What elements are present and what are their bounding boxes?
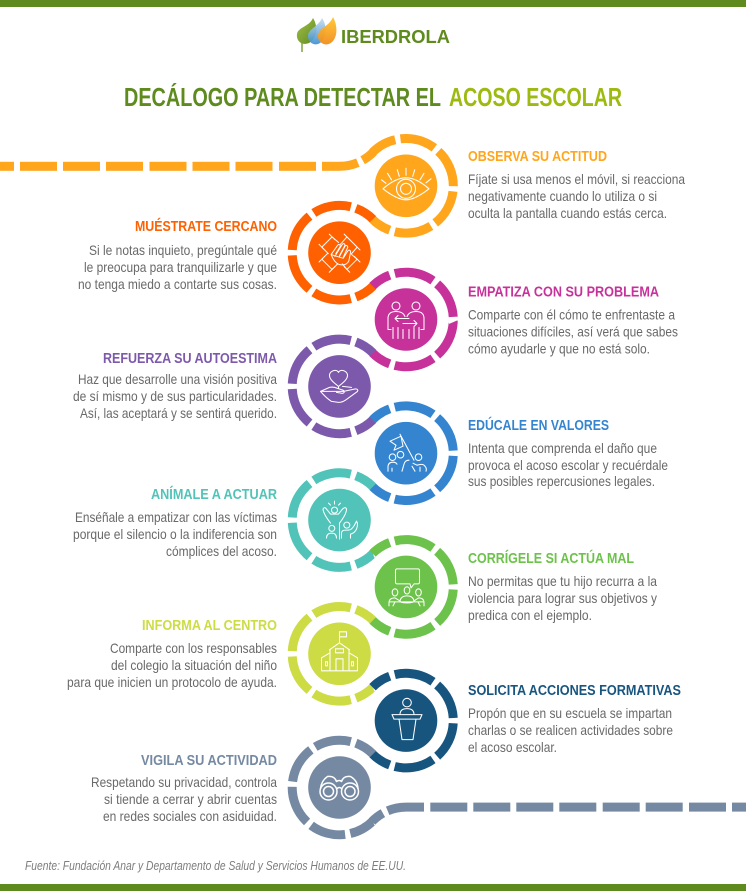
icon: meeting with speech bubble bbox=[389, 569, 424, 606]
text: anímale a actuar: cómplices del acoso. bbox=[166, 543, 277, 559]
text: informa al centro: INFORMA AL CENTRO bbox=[142, 618, 277, 634]
text: muéstrate cercano: le preocupa para tranquilizarle y que bbox=[84, 259, 277, 275]
text: observa su actitud bbox=[468, 149, 685, 221]
text: corrígele si actúa mal: predica con el ejemplo. bbox=[468, 607, 592, 623]
text: edúcale en valores: Intenta que comprenda el daño que bbox=[468, 440, 657, 456]
text: anímale a actuar: ANÍMALE A ACTUAR bbox=[151, 486, 277, 503]
text: refuerza su autoestima: REFUERZA SU AUTOESTIMA bbox=[103, 351, 277, 367]
text: corrígele si actúa mal: CORRÍGELE SI ACTÚA MAL bbox=[468, 549, 634, 567]
step 8: school bbox=[273, 587, 406, 721]
text: observa su actitud: oculta la pantalla cuando estás cerca. bbox=[468, 205, 667, 221]
icon: cheering people bbox=[323, 501, 358, 539]
entry dashed line bbox=[0, 52, 406, 186]
text: observa su actitud: OBSERVA SU ACTITUD bbox=[468, 149, 607, 165]
text: edúcale en valores: provoca el acoso escolar y recuérdale bbox=[468, 457, 668, 473]
icon: heart over hand bbox=[320, 370, 358, 402]
step 1: eye bbox=[353, 133, 459, 238]
text: informa al centro: Comparte con los responsables bbox=[110, 640, 277, 656]
title: ACOSO ESCOLAR bbox=[449, 82, 622, 112]
text: empatiza con su problema: EMPATIZA CON SU PROBLEMA bbox=[468, 284, 659, 300]
text: muéstrate cercano: no tenga miedo a contarte sus cosas. bbox=[78, 276, 277, 292]
text: empatiza con su problema: cómo ayudarle y que no está solo. bbox=[468, 340, 650, 356]
text: muéstrate cercano: Si le notas inquieto, pregúntale qué bbox=[89, 242, 277, 258]
logo: Iberdrola bbox=[297, 17, 450, 52]
logo: Iberdrola: IBERDROLA bbox=[341, 27, 450, 47]
text: refuerza su autoestima: de sí mismo y de sus particularidades. bbox=[73, 388, 277, 404]
text: vigila su actividad bbox=[91, 753, 277, 824]
text: solicita acciones formativas: charlas o se realicen actividades sobre bbox=[468, 722, 673, 738]
icon: eye bbox=[382, 168, 431, 200]
text: vigila su actividad: Respetando su privacidad, controla bbox=[91, 774, 277, 790]
bottom bar bbox=[0, 884, 746, 891]
text: solicita acciones formativas: Propón que en su escuela se impartan bbox=[468, 705, 672, 721]
step 9: podium bbox=[356, 671, 456, 770]
text: corrígele si actúa mal bbox=[468, 549, 657, 623]
text: anímale a actuar: Enséñale a empatizar con las víctimas bbox=[75, 509, 277, 525]
text: solicita acciones formativas: el acoso escolar. bbox=[468, 739, 557, 755]
text: refuerza su autoestima: Haz que desarrolle una visión positiva bbox=[78, 371, 277, 387]
icon: binoculars bbox=[320, 776, 358, 800]
text: informa al centro bbox=[67, 618, 277, 690]
text: anímale a actuar: porque el silencio o la indiferencia son bbox=[73, 526, 277, 542]
step 3: people bbox=[356, 270, 456, 369]
text: solicita acciones formativas: SOLICITA ACCIONES FORMATIVAS bbox=[468, 683, 681, 699]
text: edúcale en valores: sus posibles repercusiones legales. bbox=[468, 473, 655, 489]
step 10: binoculars bbox=[273, 721, 406, 854]
step 7: meeting bbox=[356, 537, 456, 637]
top bar bbox=[0, 0, 746, 7]
text: empatiza con su problema bbox=[468, 284, 678, 356]
step 2: hands bbox=[273, 186, 406, 320]
text: edúcale en valores: EDÚCALE EN VALORES bbox=[468, 416, 609, 434]
title: DECÁLOGO PARA DETECTAR EL bbox=[124, 82, 441, 112]
text: observa su actitud: negativamente cuando lo utiliza o si bbox=[468, 188, 657, 204]
text: vigila su actividad: en redes sociales con asiduidad. bbox=[103, 808, 277, 824]
source note: Fuente: Fundación Anar y Departamento de Salud y Servicios Humanos de EE.UU. bbox=[25, 858, 406, 873]
text: anímale a actuar bbox=[73, 486, 277, 559]
text: refuerza su autoestima: Así, las aceptará y se sentirá querido. bbox=[80, 405, 277, 421]
text: solicita acciones formativas bbox=[468, 683, 681, 755]
icon: two people exchanging bbox=[388, 302, 424, 338]
icon: speaker at podium bbox=[392, 698, 422, 740]
text: empatiza con su problema: Comparte con él cómo te enfrentaste a bbox=[468, 306, 675, 322]
icon: group with flag bbox=[388, 434, 426, 471]
exit dashed line bbox=[339, 788, 746, 891]
step 6: cheering people bbox=[273, 453, 406, 587]
text: corrígele si actúa mal: No permitas que tu hijo recurra a la bbox=[468, 573, 657, 589]
text: vigila su actividad: si tiende a cerrar y abrir cuentas bbox=[104, 791, 277, 807]
text: informa al centro: del colegio la situación del niño bbox=[111, 657, 277, 673]
text: corrígele si actúa mal: violencia para lograr sus objetivos y bbox=[468, 590, 657, 606]
step 4: heart in hand bbox=[273, 320, 406, 453]
text: informa al centro: para que inicien un protocolo de ayuda. bbox=[67, 674, 277, 690]
icon: school building bbox=[322, 632, 358, 671]
text: muéstrate cercano: MUÉSTRATE CERCANO bbox=[135, 218, 277, 235]
text: muéstrate cercano bbox=[78, 218, 277, 292]
text: vigila su actividad: VIGILA SU ACTIVIDAD bbox=[141, 753, 277, 769]
icon: stacked hands bbox=[319, 234, 360, 272]
text: refuerza su autoestima bbox=[73, 351, 277, 421]
step 5: flag group bbox=[356, 403, 456, 503]
text: edúcale en valores bbox=[468, 416, 668, 489]
text: observa su actitud: Fíjate si usa menos el móvil, si reacciona bbox=[468, 171, 685, 187]
text: empatiza con su problema: situaciones difíciles, así verá que sabes bbox=[468, 324, 678, 340]
